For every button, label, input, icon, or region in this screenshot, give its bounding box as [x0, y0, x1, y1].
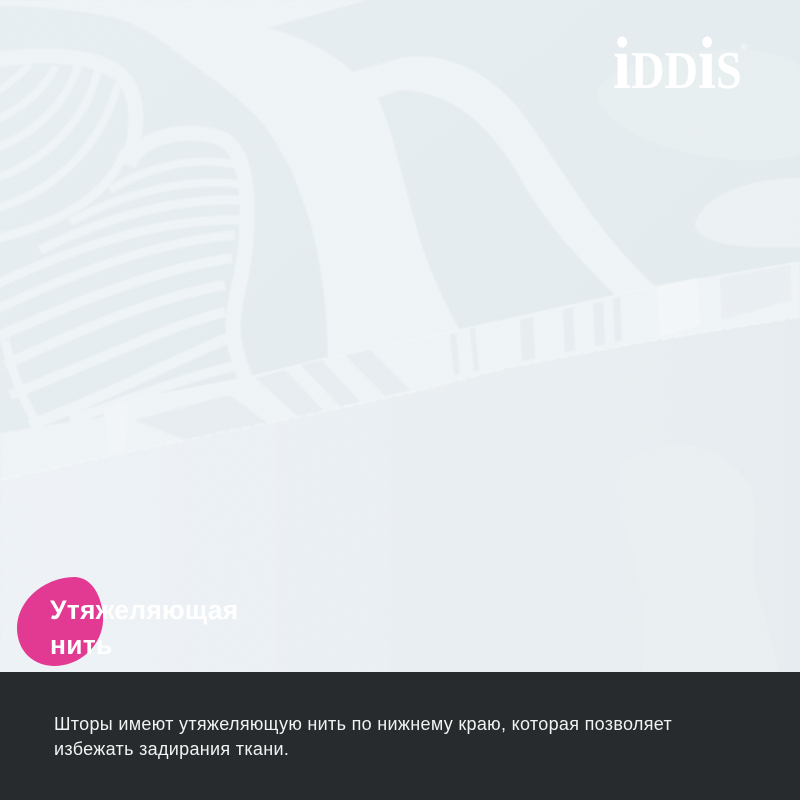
light block on hem	[657, 278, 700, 337]
footer panel	[0, 672, 800, 800]
heading	[50, 595, 238, 660]
curtain hem with stripes	[0, 262, 800, 480]
fold highlight	[117, 262, 800, 403]
description text	[54, 714, 672, 759]
heading: Утяжеляющая	[50, 595, 238, 625]
heading: нить	[50, 630, 113, 660]
lower fabric below hem	[0, 317, 800, 677]
description text: избежать задирания ткани.	[54, 738, 289, 758]
hem stripes	[135, 265, 792, 442]
logo: iddis: iDDiS	[613, 23, 742, 105]
description text: Шторы имеют утяжеляющую нить по нижнему краю, которая позволяет	[54, 714, 672, 734]
hem stitching	[0, 317, 800, 480]
light stem and curved ribbon	[0, 0, 665, 370]
soft flower shape on lower fabric	[617, 445, 780, 677]
leaf two	[0, 133, 262, 425]
hem curl	[104, 403, 128, 454]
flower blob at right	[695, 178, 800, 248]
flower blob behind logo	[597, 50, 800, 160]
pink blob	[17, 577, 103, 666]
leaf one	[0, 56, 136, 240]
logo: iddis: ®	[741, 42, 748, 52]
